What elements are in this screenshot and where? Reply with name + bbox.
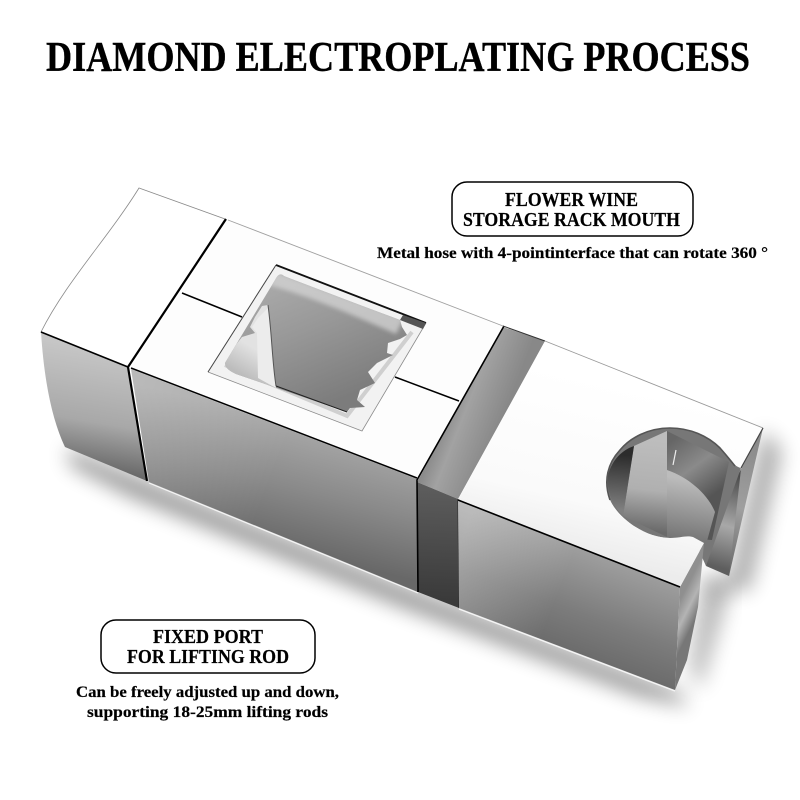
left block top face <box>41 188 225 367</box>
callout box <box>101 620 315 673</box>
right block end face <box>675 543 704 690</box>
callout box <box>452 182 693 236</box>
callout heading <box>127 626 289 668</box>
product photo: shower rail slider bracket <box>41 188 782 706</box>
connector band <box>417 326 545 608</box>
callout heading: FIXED PORT <box>153 626 263 648</box>
seam lines <box>182 293 242 317</box>
middle block <box>128 219 503 592</box>
right block with holder <box>149 341 763 691</box>
callout: fixed port for lifting rod <box>76 620 339 721</box>
left block <box>41 188 225 481</box>
band front <box>417 482 459 608</box>
socket rim <box>208 265 426 431</box>
callout description: Metal hose with 4-pointinterface that can rotate 360 ° <box>377 245 768 262</box>
callout heading: FLOWER WINE <box>505 189 638 211</box>
chrome rim of holder <box>607 428 735 500</box>
tail arm inner face <box>706 469 741 576</box>
callout heading <box>463 189 680 231</box>
socket glow and left rail, clipped to cavity <box>220 272 404 388</box>
left block front face <box>41 332 147 481</box>
callout: flower wine storage rack mouth <box>377 182 768 262</box>
callout description <box>76 684 339 721</box>
middle block top face <box>131 220 503 478</box>
socket inner cavity with teeth <box>225 274 407 412</box>
callout description: supporting 18-25mm lifting rods <box>87 704 328 721</box>
tail arm right face <box>722 428 763 576</box>
callout description: Can be freely adjusted up and down, <box>76 684 339 701</box>
square socket opening <box>208 265 426 431</box>
round holder interior <box>607 428 741 566</box>
right block front face <box>458 500 680 690</box>
drop shadow under the bracket <box>66 430 782 706</box>
callout heading: STORAGE RACK MOUTH <box>463 209 680 231</box>
callout heading: FOR LIFTING ROD <box>127 646 289 668</box>
right block top face <box>458 341 763 587</box>
band top <box>417 327 545 499</box>
middle block front face <box>131 369 418 592</box>
